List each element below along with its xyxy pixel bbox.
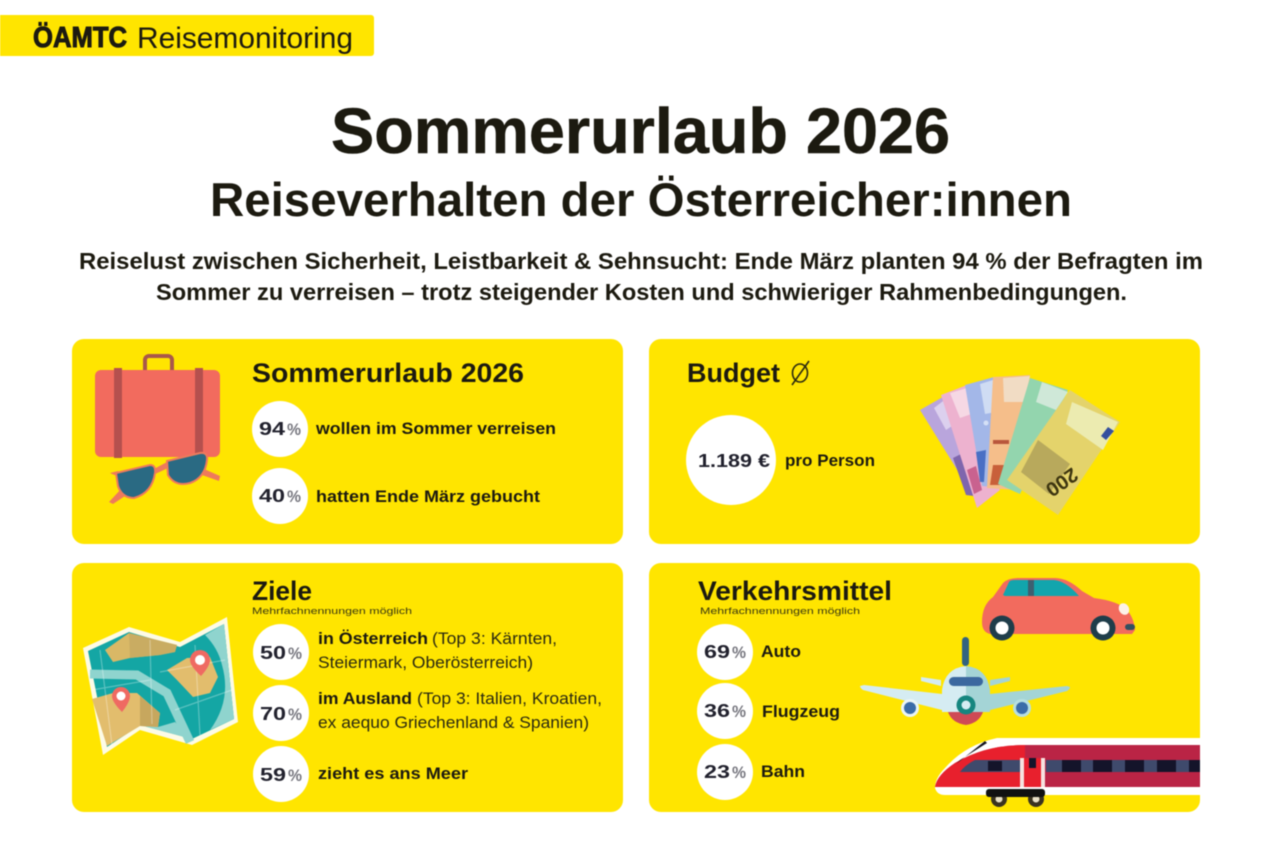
stat: 59 %: %	[288, 766, 302, 785]
subtitle: Reiseverhalten der Österreicher:innen	[210, 173, 1072, 226]
stat: 40 %: 40	[259, 486, 285, 506]
intro text	[79, 248, 1203, 305]
stat: 50 %: %	[288, 644, 302, 663]
stat: 69 %: Auto	[761, 642, 801, 661]
stat: 94 %	[252, 401, 556, 457]
stat: 50 %: (Top 3: Kärnten,	[432, 629, 557, 648]
heading: Budget	[687, 358, 780, 388]
stat: 36 %	[697, 683, 840, 739]
stat: 59 %	[253, 746, 468, 802]
stat: 40 %: %	[287, 487, 301, 506]
stat: 59 %: zieht es ans Meer	[318, 764, 468, 783]
icon: train	[935, 738, 1200, 807]
panel: Budget	[649, 339, 1200, 544]
stat: 50 %: in Österreich	[318, 629, 428, 648]
stat: 23 %: %	[732, 763, 746, 782]
panel: Sommerurlaub 2026	[72, 339, 623, 544]
stat: 69 %: 69	[704, 642, 730, 662]
stat: 40 %	[252, 468, 540, 524]
stat: 1.189 euro	[686, 415, 875, 505]
stat: 69 %: %	[732, 643, 746, 662]
icon: euro banknotes	[920, 375, 1120, 515]
heading: Mehrfachnennungen möglich	[700, 606, 860, 617]
icon: red pin	[190, 650, 210, 676]
icon: suitcase	[95, 356, 220, 458]
stat: 50 %	[253, 624, 557, 680]
intro text: Reiselust zwischen Sicherheit, Leistbarkeit & Sehnsucht: Ende März planten 94 % der Befragten im	[79, 248, 1203, 274]
stat: 59 %: 59	[260, 765, 286, 785]
stat: 50 %: 50	[260, 643, 286, 663]
stat: 40 %: hatten Ende März gebucht	[316, 487, 540, 506]
icon: sunglasses	[109, 453, 220, 504]
title: Sommerurlaub 2026	[331, 95, 950, 167]
banknote value: 200	[1041, 463, 1082, 500]
icon: folded map	[83, 617, 238, 755]
icon: red pin	[112, 687, 130, 712]
stat: 70 %: %	[288, 705, 302, 724]
heading: Ziele	[252, 576, 312, 606]
stat: 36 %: %	[732, 702, 746, 721]
panel: Ziele	[72, 563, 623, 812]
stat: 70 %	[253, 685, 602, 741]
stat: 23 %: Bahn	[761, 762, 805, 781]
stat: 70 %: 70	[260, 704, 286, 724]
heading: Sommerurlaub 2026	[252, 358, 524, 388]
stat: 36 %: Flugzeug	[762, 702, 840, 721]
stat: 70 %: im Ausland	[318, 689, 412, 708]
heading: Mehrfachnennungen möglich	[252, 606, 412, 617]
stat: 1.189 euro: 1.189 €	[698, 451, 770, 471]
icon: car	[982, 578, 1135, 640]
intro text: Sommer zu verreisen – trotz steigender Kosten und schwieriger Rahmenbedingungen.	[156, 279, 1127, 305]
icon: airplane	[860, 637, 1070, 725]
stat: 23 %	[697, 744, 805, 800]
stat: 70 %: ex aequo Griechenland & Spanien)	[318, 713, 589, 732]
header bar: ÖAMTC Reisemonitoring: Reisemonitoring	[137, 22, 353, 55]
stat: 23 %: 23	[704, 762, 730, 782]
heading	[252, 576, 412, 617]
stat: 94 %: wollen im Sommer verreisen	[315, 419, 556, 438]
stat: 50 %: Steiermark, Oberösterreich)	[318, 653, 533, 672]
stat: 94 %: %	[287, 420, 301, 439]
header bar: ÖAMTC Reisemonitoring	[0, 15, 374, 56]
stat: 36 %: 36	[704, 701, 730, 721]
panel: Verkehrsmittel	[649, 563, 1200, 812]
stat: 94 %: 94	[259, 419, 285, 439]
header bar: ÖAMTC Reisemonitoring: ÖAMTC	[33, 21, 127, 54]
stat: 1.189 euro: pro Person	[785, 451, 875, 470]
heading: Verkehrsmittel	[698, 576, 892, 606]
stat: 70 %: (Top 3: Italien, Kroatien,	[417, 689, 602, 708]
stat: 69 %	[697, 624, 801, 680]
